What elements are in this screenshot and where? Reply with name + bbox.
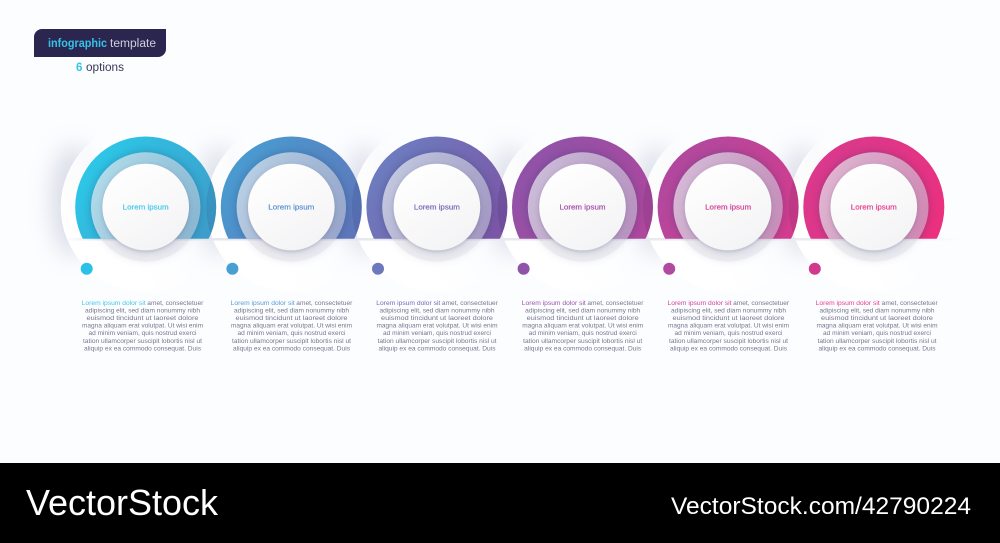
- step 4 text: ad minim veniam, quis nostrud exerci: [529, 330, 637, 337]
- title badge: template: [110, 38, 156, 50]
- subtitle: 6 options: 6: [76, 62, 82, 74]
- footer bar: [0, 463, 1000, 543]
- step 2 text: Lorem ipsum dolor sit: [231, 300, 295, 307]
- step 2 dot: [226, 263, 238, 275]
- step 4 text: amet, consectetuer: [587, 300, 644, 307]
- step 6 text: Lorem ipsum dolor sit: [816, 300, 880, 307]
- step 4 text: magna aliquam erat volutpat. Ut wisi enim: [522, 323, 643, 330]
- step 1 text: aliquip ex ea commodo consequat. Duis: [84, 345, 202, 352]
- step 1 label: Lorem ipsum: [123, 202, 169, 212]
- step 6 ring: [789, 136, 944, 262]
- footer image id: VectorStock.com/42790224: [671, 493, 971, 520]
- step 3 ring: [352, 136, 508, 262]
- subtitle: 6 options: options: [86, 62, 124, 74]
- title badge: infographic: [48, 38, 108, 50]
- step 1: [75, 136, 216, 352]
- step 2 text: aliquip ex ea commodo consequat. Duis: [233, 345, 351, 352]
- step 5 text: ad minim veniam, quis nostrud exerci: [674, 330, 782, 337]
- step 6 text: amet, consectetuer: [882, 300, 939, 307]
- step 1 text: [82, 300, 204, 352]
- step 4 text: adipiscing elit, sed diam nonummy nibh: [525, 308, 641, 315]
- step 4 text: euismod tincidunt ut laoreet dolore: [527, 315, 639, 322]
- step 3 text: Lorem ipsum dolor sit: [376, 300, 440, 307]
- step 1 dot: [81, 263, 93, 275]
- step 5 ring: [643, 136, 799, 262]
- step 5 text: Lorem ipsum dolor sit: [668, 300, 732, 307]
- step 1 text: magna aliquam erat volutpat. Ut wisi enim: [82, 323, 203, 330]
- step 4 dot: [518, 263, 530, 275]
- step 5 label: Lorem ipsum: [705, 202, 751, 212]
- step 2 text: amet, consectetuer: [296, 300, 353, 307]
- step 4 text: aliquip ex ea commodo consequat. Duis: [524, 345, 642, 352]
- step 1 text: ad minim veniam, quis nostrud exerci: [88, 330, 196, 337]
- footer logo: VectorStock: [26, 482, 219, 523]
- step 3 text: amet, consectetuer: [442, 300, 499, 307]
- step 6 text: magna aliquam erat volutpat. Ut wisi enim: [816, 323, 938, 330]
- step 5 text: adipiscing elit, sed diam nonummy nibh: [671, 308, 786, 315]
- step 3 text: magna aliquam erat volutpat. Ut wisi enim: [376, 323, 498, 330]
- title badge: [34, 29, 166, 57]
- step 5 text: amet, consectetuer: [733, 300, 790, 307]
- step 3 dot: [372, 263, 384, 275]
- step 5 text: magna aliquam erat volutpat. Ut wisi enim: [668, 323, 789, 330]
- step 3 text: ad minim veniam, quis nostrud exerci: [383, 330, 491, 337]
- step 1 text: amet, consectetuer: [147, 300, 204, 307]
- step 1 text: Lorem ipsum dolor sit: [82, 300, 146, 307]
- step 2 text: adipiscing elit, sed diam nonummy nibh: [234, 308, 349, 315]
- step 2 label: Lorem ipsum: [268, 202, 314, 212]
- step 2 text: ad minim veniam, quis nostrud exerci: [238, 330, 346, 337]
- step 2 text: euismod tincidunt ut laoreet dolore: [236, 315, 348, 322]
- step 5: [643, 136, 799, 352]
- step 6 dot: [809, 263, 821, 275]
- step 3 text: tation ullamcorper suscipit lobortis nisl ut: [378, 338, 497, 345]
- step 1 text: adipiscing elit, sed diam nonummy nibh: [85, 308, 200, 315]
- step 3 text: euismod tincidunt ut laoreet dolore: [381, 315, 493, 322]
- step 5 text: [668, 300, 790, 352]
- step 6 text: euismod tincidunt ut laoreet dolore: [821, 315, 933, 322]
- step 4 text: Lorem ipsum dolor sit: [522, 300, 586, 307]
- step 6 text: ad minim veniam, quis nostrud exerci: [823, 330, 931, 337]
- step 2 ring: [206, 136, 362, 262]
- step 5 dot: [663, 263, 675, 275]
- step 3 text: [376, 300, 499, 352]
- step 4 ring: [498, 136, 653, 262]
- step 4 text: [522, 300, 644, 352]
- step 6 label: Lorem ipsum: [851, 202, 897, 212]
- step 5 text: tation ullamcorper suscipit lobortis nisl ut: [669, 338, 788, 345]
- step 2 text: tation ullamcorper suscipit lobortis nisl ut: [232, 338, 351, 345]
- step 2: [206, 136, 362, 352]
- step 2 text: [231, 300, 353, 352]
- step 3: [352, 136, 508, 352]
- step 3 text: aliquip ex ea commodo consequat. Duis: [378, 345, 496, 352]
- step 2 text: magna aliquam erat volutpat. Ut wisi enim: [231, 323, 352, 330]
- step 4 label: Lorem ipsum: [560, 202, 606, 212]
- backdrop crescents and shadows: [52, 122, 959, 292]
- step 5 text: euismod tincidunt ut laoreet dolore: [672, 315, 785, 322]
- step 6 text: aliquip ex ea commodo consequat. Duis: [818, 345, 936, 352]
- step 6 text: tation ullamcorper suscipit lobortis nisl ut: [818, 338, 937, 345]
- step 1 text: tation ullamcorper suscipit lobortis nisl ut: [83, 338, 202, 345]
- step 1 text: euismod tincidunt ut laoreet dolore: [86, 315, 199, 322]
- step 4: [498, 136, 653, 352]
- step 1 ring: [75, 136, 216, 262]
- step 3 label: Lorem ipsum: [414, 202, 460, 212]
- step 3 text: adipiscing elit, sed diam nonummy nibh: [380, 308, 495, 315]
- step 6 text: [816, 300, 939, 352]
- step 6 text: adipiscing elit, sed diam nonummy nibh: [820, 308, 935, 315]
- step 6: [789, 136, 944, 352]
- baseline strip: [60, 238, 960, 240]
- step 4 text: tation ullamcorper suscipit lobortis nisl ut: [523, 338, 642, 345]
- step 5 text: aliquip ex ea commodo consequat. Duis: [670, 345, 788, 352]
